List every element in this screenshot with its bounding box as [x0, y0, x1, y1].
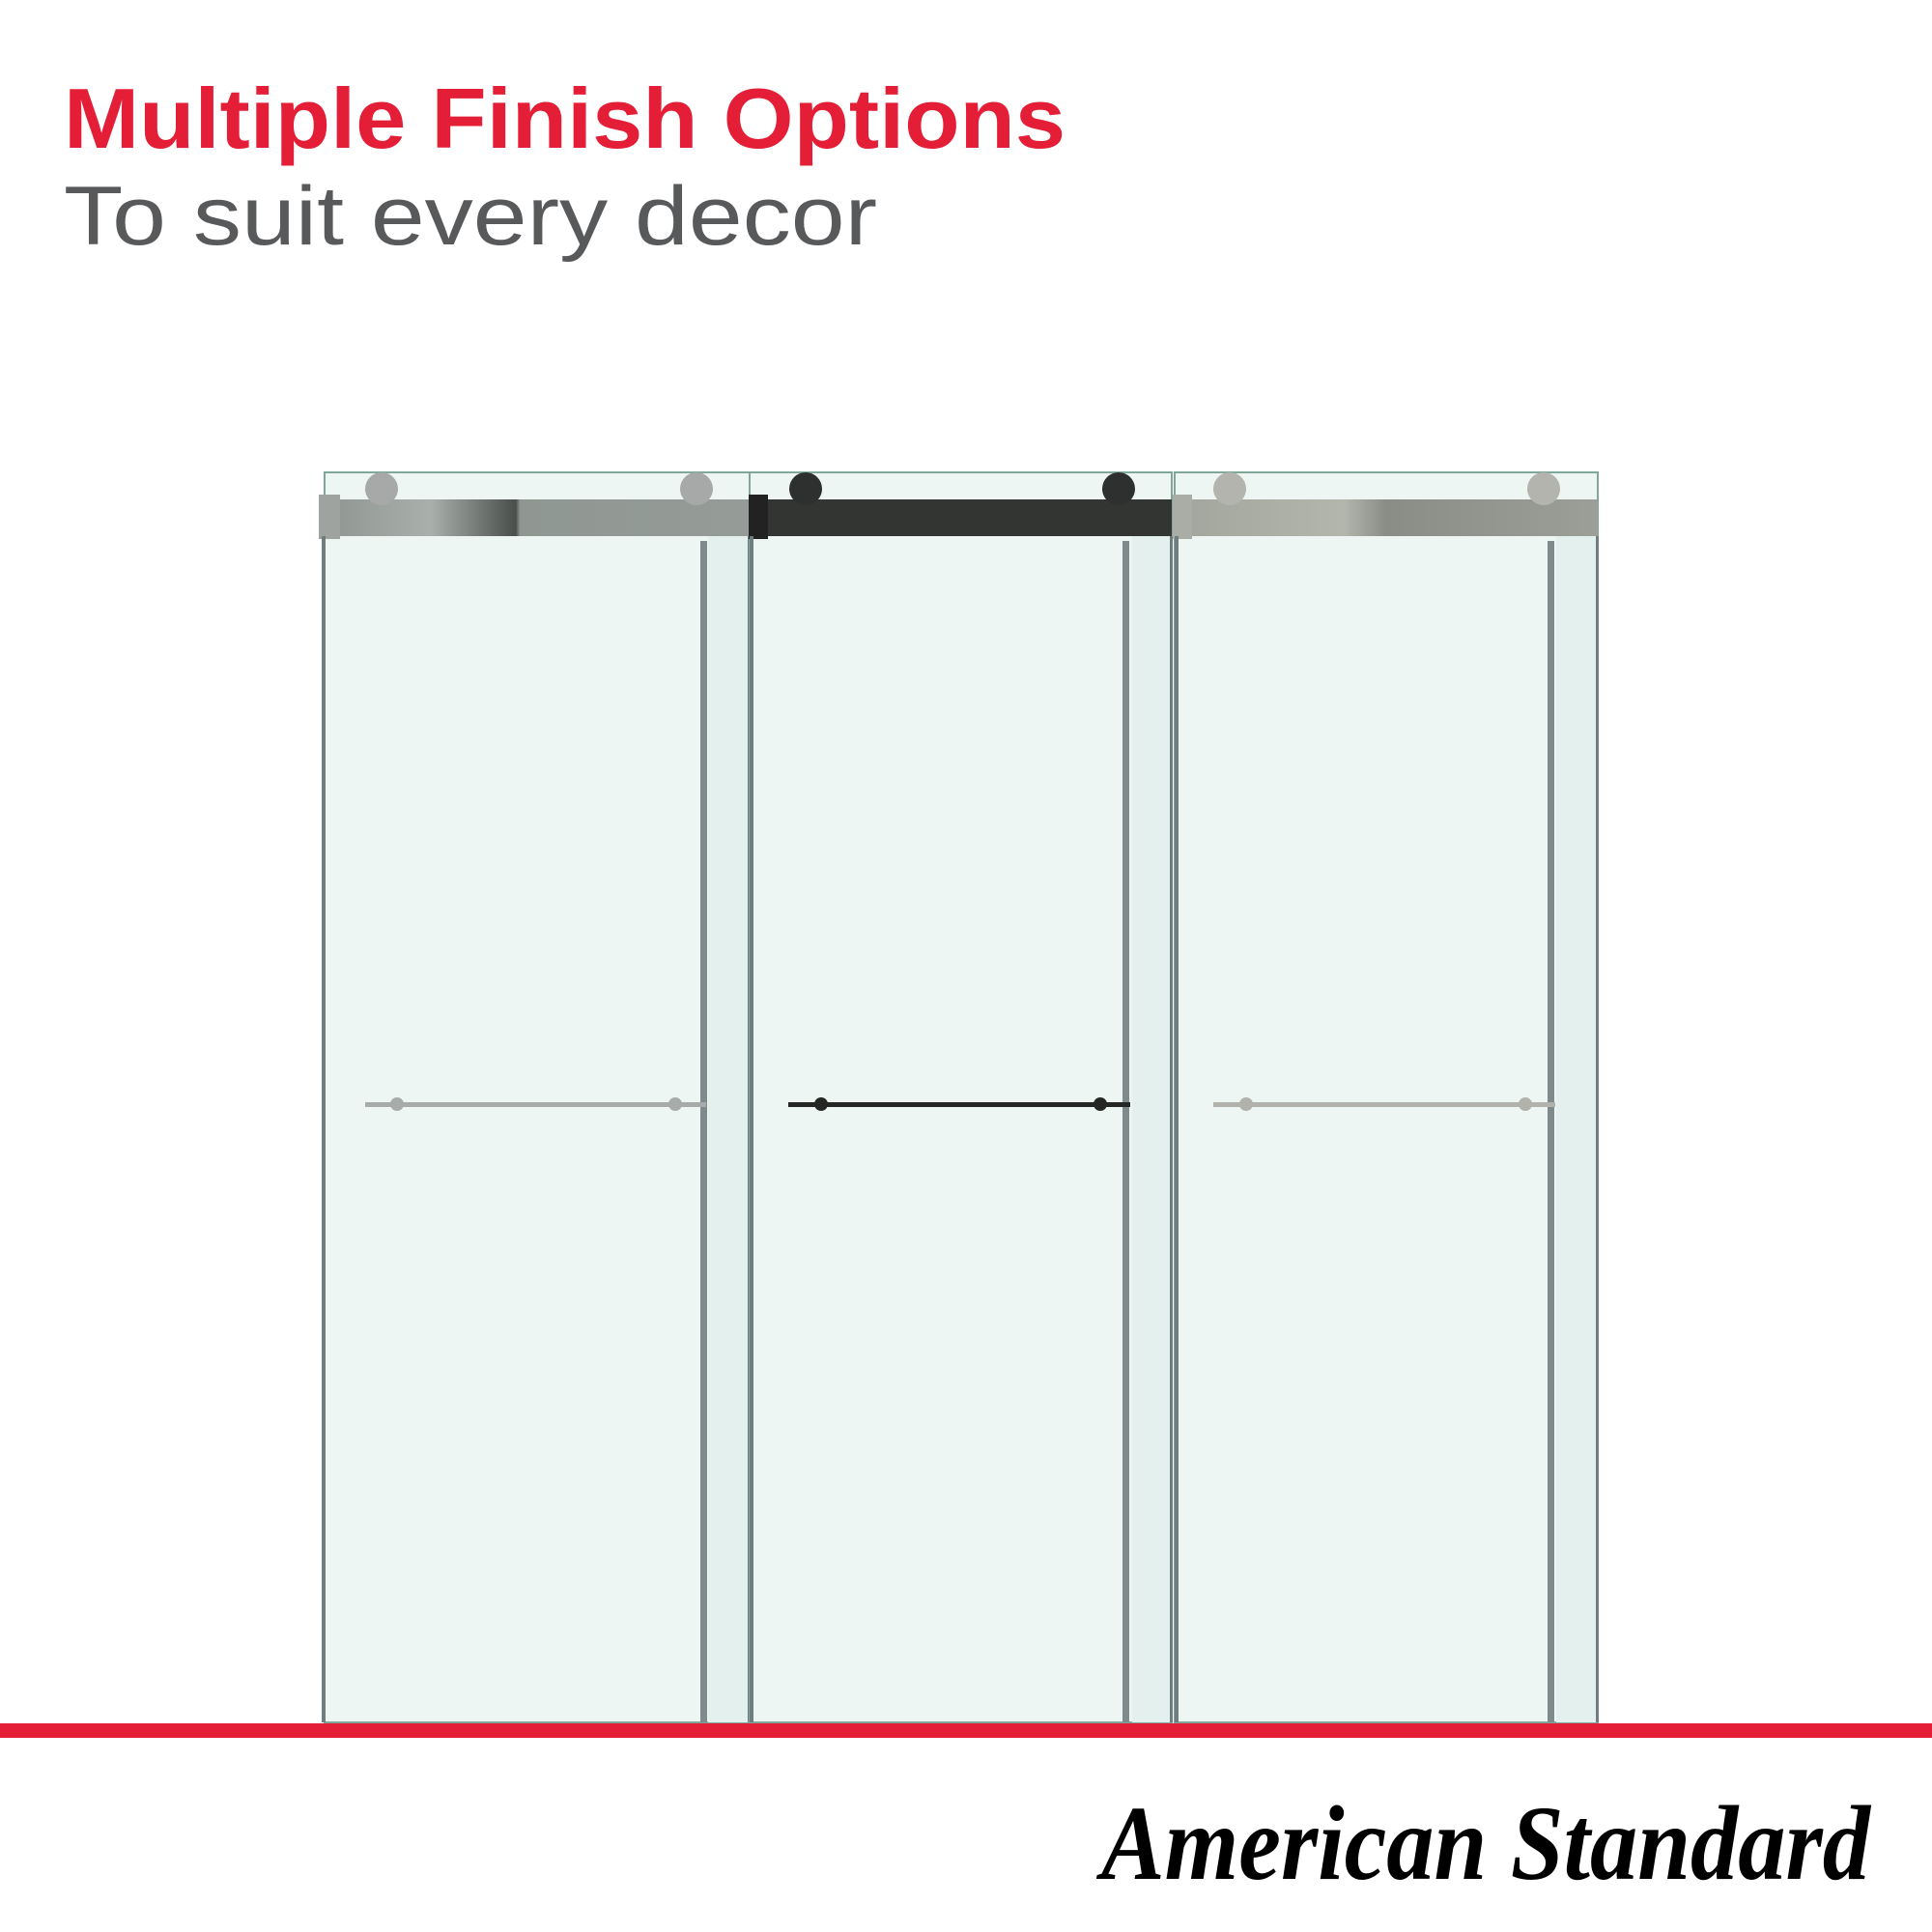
title: Multiple Finish Options	[64, 71, 1065, 166]
door: matte black	[749, 472, 1173, 1722]
door: chrome	[319, 472, 751, 1722]
red floor line	[0, 1723, 1932, 1738]
door: brushed nickel	[1173, 472, 1599, 1722]
subtitle: To suit every decor	[64, 170, 877, 263]
